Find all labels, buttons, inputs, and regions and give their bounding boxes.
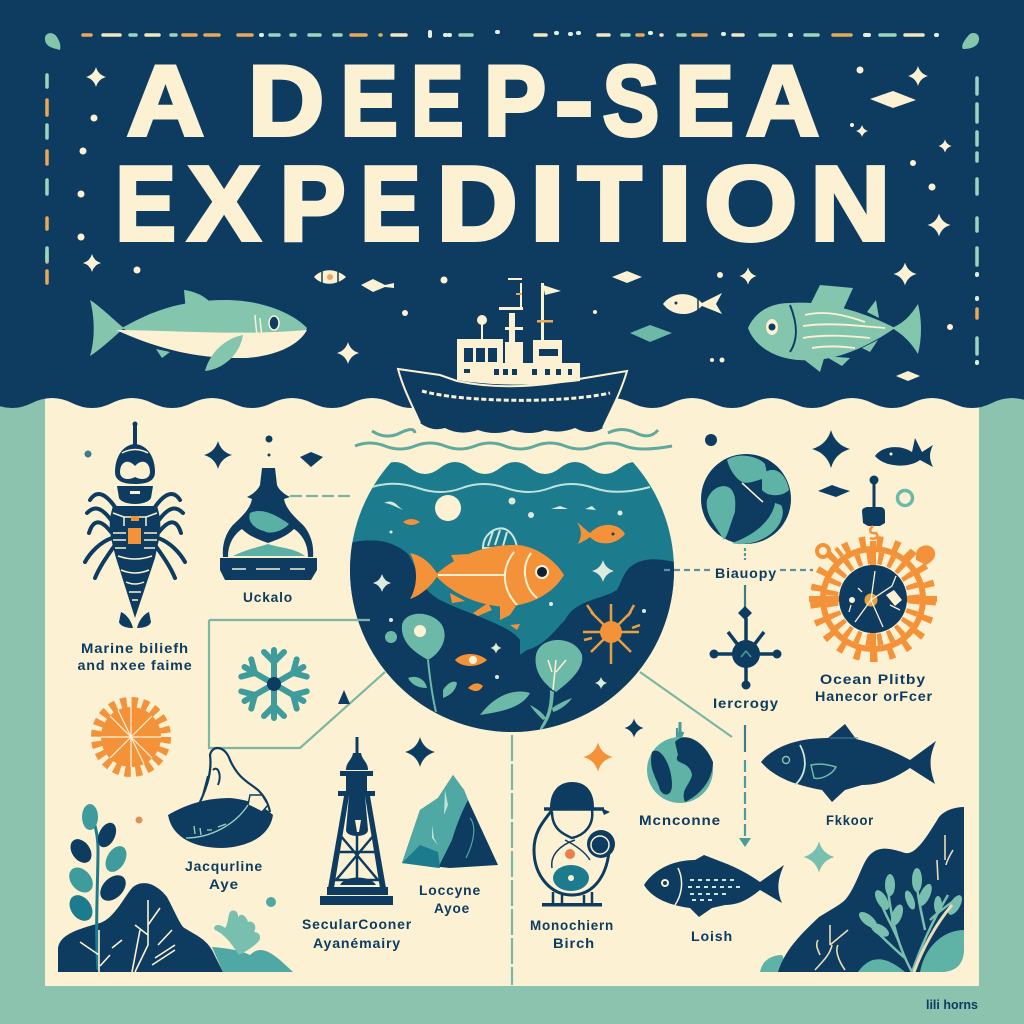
navy header with wavy edge [0, 0, 1024, 408]
label: lighthouse: SecularCooner [302, 917, 412, 932]
label: rock [419, 883, 481, 916]
label: compass: Iercrogy [713, 696, 779, 711]
small striped fish [314, 270, 346, 284]
teal mound with coral [212, 910, 293, 972]
downward arrow [739, 838, 751, 847]
label: rock: Ayoe [434, 901, 470, 916]
title: N [810, 145, 890, 263]
sky stars and dots [78, 66, 953, 381]
title: A [127, 45, 201, 156]
shark [90, 290, 307, 371]
woven basket icon [168, 748, 273, 848]
title: P [280, 145, 346, 263]
label: marine [78, 641, 192, 673]
frame corner leaves [45, 33, 979, 50]
title: E [676, 45, 734, 156]
small cream fish [663, 293, 722, 314]
orange sun icon [97, 703, 165, 771]
signature: lili horns [926, 997, 978, 1012]
orange gear compass icon [809, 476, 937, 662]
label: gear [815, 672, 933, 704]
snowflake icon [240, 650, 308, 718]
central ocean globe [350, 456, 674, 732]
research ship [398, 278, 627, 433]
title: X [188, 145, 260, 263]
label: basket: Aye [209, 877, 239, 892]
star and fish icon upper right [812, 430, 933, 497]
right rock with seaweed [760, 807, 965, 972]
mint star [804, 842, 834, 872]
label: large fish: Fkkoor [826, 813, 874, 828]
orange and teal dots [136, 816, 276, 907]
label: globe: Mcnconne [639, 813, 721, 828]
label: robot: Monochiern [530, 918, 614, 933]
earth globe icon [701, 434, 791, 544]
title [115, 45, 890, 263]
dashed header frame [47, 32, 977, 363]
title: P [484, 45, 546, 156]
mint diamond fish [630, 325, 672, 342]
title: S [603, 45, 659, 156]
left seaweed and rock [58, 804, 223, 972]
compass buoy icon [710, 606, 782, 690]
title: E [115, 145, 176, 263]
dotted navy fish [644, 855, 784, 917]
label: gear: Ocean Plitby [820, 672, 926, 687]
sea plants [385, 614, 582, 732]
label: globe two: Biauopy [715, 566, 777, 581]
orange star [584, 742, 612, 772]
small triangle marker [338, 690, 350, 704]
orange starburst [583, 604, 640, 664]
label: dotted fish: Loish [691, 929, 733, 944]
title: D [437, 145, 518, 263]
label: rock: Loccyne [419, 883, 481, 898]
label: lighthouse [302, 917, 412, 951]
sea surface waves [355, 430, 672, 449]
lobster diver icon [84, 422, 185, 628]
label: lighthouse: Ayanémairy [313, 936, 401, 951]
label: basket: Jacqurline [185, 859, 263, 874]
label: flask: Uckalo [243, 590, 293, 605]
title: T [578, 145, 642, 263]
teal rock icon [402, 775, 498, 868]
small globe icon [647, 722, 713, 803]
label: marine: Marine biliefh [81, 641, 189, 656]
title: O [704, 145, 798, 263]
title: D [248, 45, 324, 156]
main orange fish [483, 528, 517, 548]
striped fish top right [748, 285, 921, 372]
cream lower panel [45, 390, 979, 986]
small orange fishes [403, 519, 625, 691]
title: - [555, 45, 593, 156]
title: E [411, 45, 464, 156]
mint ring [898, 490, 912, 506]
label: robot: Birch [553, 936, 595, 951]
label: marine: and nxee faime [78, 658, 192, 673]
title: E [341, 45, 398, 156]
small star [624, 718, 644, 738]
title: I [530, 145, 565, 263]
label: gear: Hanecor orFcer [815, 689, 933, 704]
label: robot [530, 918, 614, 951]
seabed silhouette [350, 540, 674, 732]
diving robot icon [534, 782, 615, 906]
star above rock [405, 737, 435, 767]
title: A [746, 45, 819, 156]
connector lines [209, 496, 813, 985]
stars near flask [204, 436, 323, 469]
sand flask icon [220, 468, 317, 580]
title: I [657, 145, 692, 263]
label: basket [185, 859, 263, 892]
lighthouse icon [320, 737, 393, 905]
title: E [360, 145, 421, 263]
large navy fish [761, 724, 936, 802]
